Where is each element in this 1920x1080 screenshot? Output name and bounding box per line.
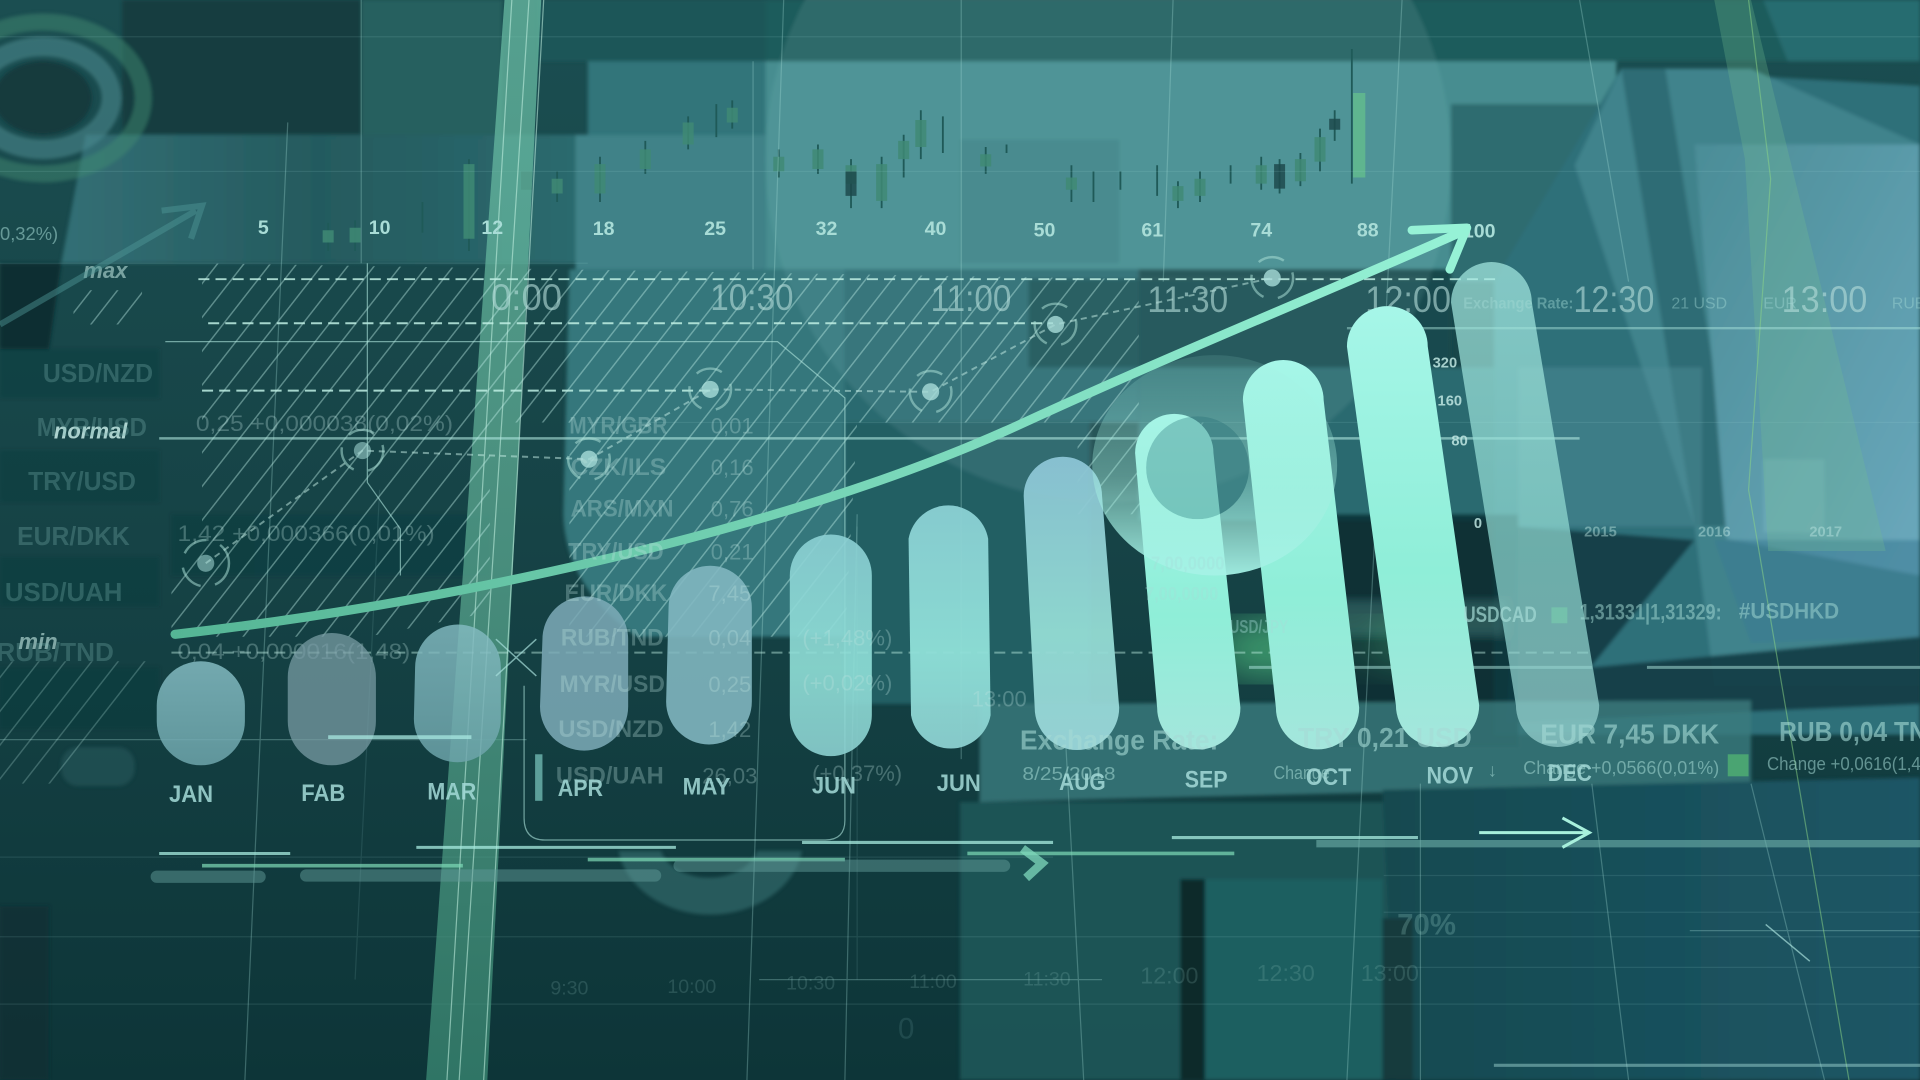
faint small labels on right: 21 USD [1671,296,1727,313]
currency pair list left: MYR/USD [37,414,147,442]
bottom timeline labels: 11:30 [1023,969,1071,991]
x-axis numbers: 12 [481,217,503,239]
table of exchange rates: ARS/MXN [571,496,673,523]
month labels: SEP [1185,766,1228,793]
exchange rate ticker: ↓ [1488,759,1497,780]
table of exchange rates: (+1,48%) [802,625,892,650]
time labels: 10:30 [710,277,793,318]
secondary bar axis values: 0 [1474,516,1482,532]
month labels: JUN [812,772,856,799]
dot-line series with target markers [182,257,1293,587]
exchange rate ticker [1020,716,1920,784]
month labels: MAR [427,779,477,806]
donut ring [1092,355,1337,576]
x-axis numbers [258,217,1496,243]
currency pair list left: TRY/USD [28,468,136,496]
table of exchange rates: CZK/ILS [571,454,666,481]
x-axis numbers: 32 [816,218,838,240]
x-axis numbers: 74 [1250,219,1272,241]
bar JUN [790,534,872,756]
USDCAD ticker row [1145,552,1839,637]
bottom timeline labels: 12:30 [1257,960,1315,986]
table of exchange rates: 0,21 [711,540,754,565]
table of exchange rates: USD/UAH [556,763,664,790]
arrow: right pointer [1479,818,1589,847]
faint small labels on right: Exchange Rate: [1463,296,1573,313]
USDCAD ticker row: 7,00,0000 [1151,552,1224,573]
time labels [491,277,1867,320]
currency pair list left: EUR/DKK [17,523,130,551]
bottom timeline labels: 0 [898,1012,914,1045]
bar FAB [288,633,376,765]
panel: right blue block [1494,0,1920,735]
rising trend arrow [175,228,1467,634]
big translucent circle [765,0,1451,502]
currency pair list left [0,223,453,667]
green glow [1212,620,1428,678]
x-axis numbers: 100 [1463,221,1496,243]
exchange rate ticker: TRY 0,21 USD [1298,722,1472,753]
time labels: 0:00 [491,277,562,318]
currency pair list left: USD/UAH [5,579,122,607]
month labels: JUN [937,770,981,797]
month labels [169,760,1592,808]
bar JUN second [909,505,991,749]
bottom timeline labels: 12:00 [1140,962,1199,988]
table of exchange rates [556,412,1027,790]
panel: top left dark blocks [0,0,1920,349]
USDCAD ticker row: #USDHKD [1739,598,1839,623]
panel: lower blocks [0,747,1920,1080]
bar MAR [414,624,501,762]
bar JAN [157,661,245,765]
bar DEC [1451,262,1599,747]
table of exchange rates: 0,04 [708,625,751,650]
x-axis numbers: 18 [593,218,615,240]
table of exchange rates: TRY/USD [568,539,664,566]
table of exchange rates: (+0,02%) [802,671,892,696]
x-axis numbers: 25 [704,218,726,240]
cross mark [496,639,1810,961]
USDCAD ticker row: 7,00,0000 [1145,583,1218,604]
secondary bar axis values: 160 [1438,393,1462,409]
bar SEP [1135,414,1240,749]
bar APR [540,596,628,751]
month labels: AUG [1059,769,1106,796]
bottom timeline labels: 13:00 [1361,960,1419,986]
bar OCT [1243,360,1359,749]
table of exchange rates: 0,76 [711,497,754,522]
target rings [182,257,1293,587]
secondary bar axis values: 2016 [1698,524,1731,540]
time labels: 12:00 [1365,279,1451,320]
exchange rate ticker: Change [1273,762,1330,783]
x-axis numbers: 10 [369,217,391,239]
bottom timeline labels: 11:00 [909,971,957,993]
green vertical band [426,0,544,1080]
secondary bar axis values: 80 [1451,434,1468,450]
green right band [1714,0,1886,1080]
table of exchange rates: 26,03 [702,764,757,789]
bottom timeline labels: 9:30 [550,977,589,999]
table of exchange rates: USD/NZD [558,716,664,743]
solid level lines [159,263,1920,840]
currency pair list left: 0,04 +0,000016(1,48) [178,639,410,664]
USDCAD ticker row: USDCAD [1463,602,1537,627]
table of exchange rates: 0,16 [711,455,754,480]
x-axis numbers: 5 [258,217,269,239]
table of exchange rates: 13:00 [972,687,1027,712]
secondary bar axis values: 2015 [1584,524,1617,540]
exchange rate ticker: Change +0,0566(0,01%) [1523,757,1719,778]
table of exchange rates: MYR/GBR [569,412,668,439]
x-axis numbers: 40 [925,218,947,240]
bar NOV [1347,306,1479,747]
USDCAD ticker row: USD/JPY [1229,616,1288,637]
panel: left table rows [0,349,490,729]
month labels: FAB [301,780,345,807]
level labels: max [83,258,128,283]
dashed max and normal levels [171,279,1592,653]
arrow: small chevron [1022,849,1042,878]
time labels: 11:00 [931,278,1011,319]
table of exchange rates: 0,01 [711,413,754,438]
percent label: 70% [1397,908,1456,941]
currency pair list left: 0,32%) [0,223,58,244]
bottom timeline labels: 10:00 [667,976,716,998]
table of exchange rates: 7,45 [708,581,751,606]
level labels: min [18,629,58,654]
currency pair list left: 1,42 +0,000366(0,01%) [178,521,435,546]
month labels: DEC [1548,760,1592,787]
bar MAY [666,566,752,744]
secondary bar axis values: 320 [1433,355,1457,371]
time labels: 12:30 [1573,279,1654,320]
table of exchange rates: EUR/DKK [564,580,668,607]
USDCAD ticker row: 1,31331|1,31329: [1580,600,1722,625]
x-axis numbers: 50 [1034,219,1055,241]
table of exchange rates: RUB/TND [561,624,664,651]
bottom stripe lines [157,737,1920,1065]
secondary bar axis values: 2017 [1809,524,1842,540]
x-axis numbers: 61 [1141,219,1163,241]
secondary bar axis values [1433,355,1842,540]
hatched regions [0,263,1224,784]
currency pair list left: USD/NZD [43,360,153,388]
bar AUG [1024,457,1119,750]
month labels: OCT [1306,764,1351,791]
exchange rate ticker: Exchange Rate: [1020,724,1218,755]
arrow: faint upper left [0,206,202,324]
dot markers [197,269,1281,572]
panel: exchange rate strip [980,700,1751,802]
time labels: 13:00 [1782,279,1867,320]
panel: dark centre right [1298,514,1920,747]
ring gauge top left [0,22,143,174]
month labels: NOV [1427,763,1474,790]
month labels: APR [558,775,603,802]
faint small labels on right: EUR [1763,296,1797,313]
table of exchange rates: 0,25 [708,672,751,697]
currency pair list left: 0,25 +0,000038(0,02%) [196,411,453,436]
month labels: MAY [683,774,730,801]
panel: upper chart backdrop [563,61,1616,704]
table of exchange rates: MYR/USD [560,671,665,698]
bar chart [157,262,1599,765]
exchange rate ticker: 8/25/2018 [1022,763,1116,784]
month labels: JAN [169,781,213,808]
faint small labels on right [1463,296,1920,313]
level labels [18,258,128,654]
time labels: 11:30 [1147,279,1228,320]
bottom timeline labels: 10:30 [786,972,835,994]
level labels: normal [54,418,128,443]
bottom timeline labels [550,960,1419,1045]
table of exchange rates: (+0,37%) [812,761,902,786]
exchange rate ticker: EUR 7,45 DKK [1540,718,1720,749]
half ring bottom [618,851,802,915]
candlestick chart [328,49,1359,251]
x-axis numbers: 88 [1357,219,1379,241]
bar marker at table [535,754,542,801]
table of exchange rates: 1,42 [708,717,751,742]
